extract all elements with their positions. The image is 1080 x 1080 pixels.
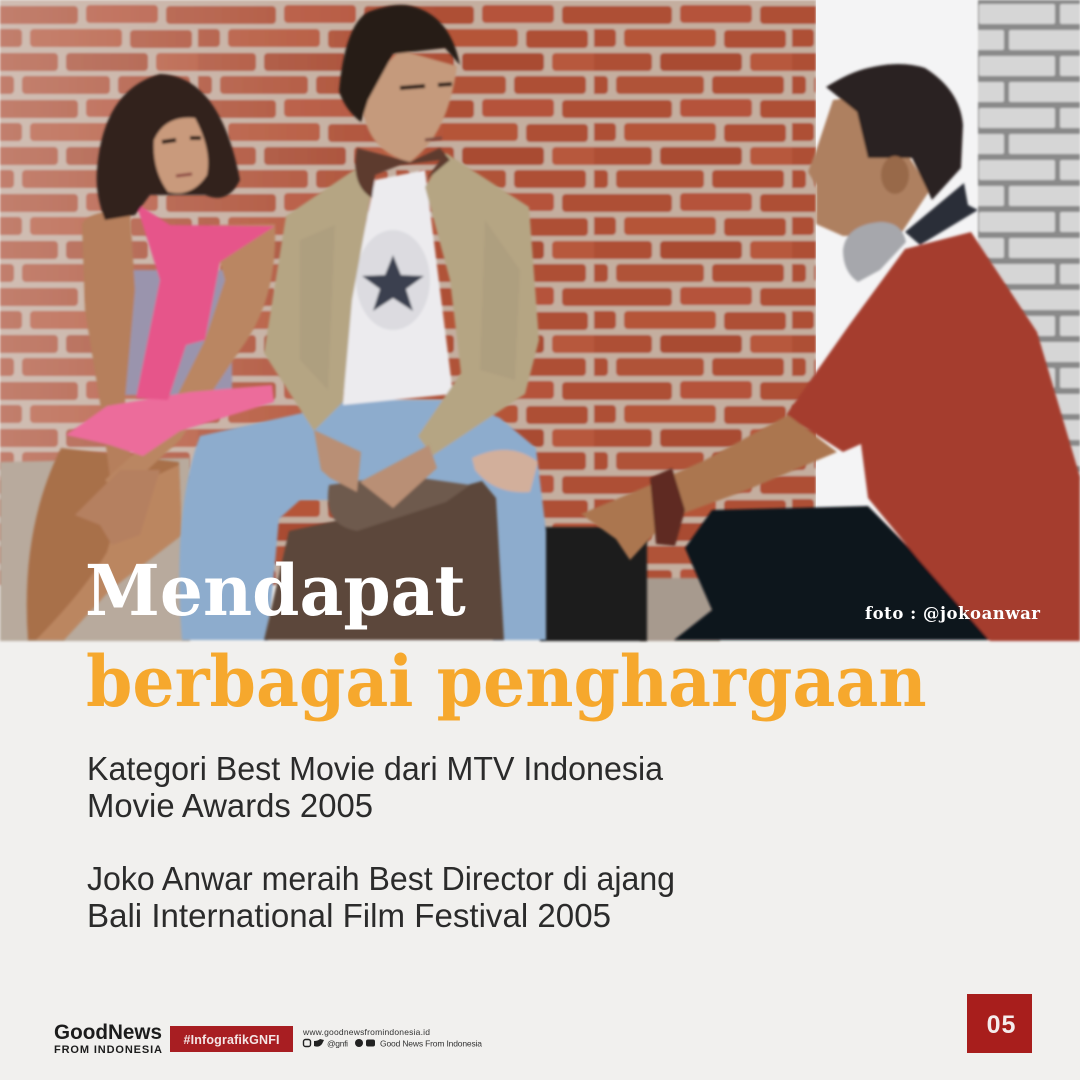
sweater xyxy=(136,203,275,400)
bag and hat xyxy=(264,430,504,640)
Converse star logo xyxy=(356,230,430,330)
shirt xyxy=(786,232,1080,641)
jeans xyxy=(179,400,546,640)
icon: youtube xyxy=(366,1040,375,1046)
award paragraph 1 xyxy=(87,750,664,824)
title line 2: berbagai penghargaan xyxy=(86,641,927,723)
body text xyxy=(87,750,675,934)
person: woman in pink xyxy=(27,74,275,640)
website and social handles xyxy=(302,1027,482,1048)
dark box xyxy=(540,527,647,641)
icon: instagram xyxy=(304,1040,310,1046)
logo: GoodNews From Indonesia xyxy=(54,1021,162,1056)
website and social handles: www.goodnewsfromindonesia.id xyxy=(302,1027,430,1037)
grey brick wall xyxy=(978,0,1080,480)
hands xyxy=(314,430,437,508)
award paragraph 2: Bali International Film Festival 2005 xyxy=(87,897,611,934)
hair and face xyxy=(97,74,240,220)
photo: film set scene with three people xyxy=(0,0,1080,641)
arms xyxy=(82,210,135,478)
white pillar xyxy=(816,0,978,510)
website and social handles: Good News From Indonesia xyxy=(380,1038,482,1048)
award paragraph 1: Kategori Best Movie dari MTV Indonesia xyxy=(87,750,664,787)
arm and hand xyxy=(581,415,837,560)
head xyxy=(808,95,930,236)
logo: GoodNews From Indonesia: GoodNews xyxy=(54,1021,162,1044)
dress xyxy=(125,270,232,395)
skirt xyxy=(66,385,274,456)
photo credit: foto : @jokoanwar xyxy=(865,604,1040,623)
footer xyxy=(54,994,1032,1056)
award paragraph 2: Joko Anwar meraih Best Director di ajang xyxy=(87,860,675,897)
person: director in red shirt with headphones xyxy=(581,64,1080,641)
knee tear xyxy=(472,450,538,492)
icon: facebook xyxy=(355,1039,363,1047)
headphones xyxy=(905,183,978,245)
legs xyxy=(27,448,182,640)
bench and floor xyxy=(0,458,720,641)
head xyxy=(362,50,457,162)
t-shirt xyxy=(343,170,453,405)
website and social handles: @gnfi xyxy=(327,1038,348,1048)
person: young man in khaki jacket xyxy=(179,5,546,640)
brick wall xyxy=(0,0,816,585)
page number: 05 xyxy=(987,1011,1016,1039)
icon: twitter xyxy=(314,1039,324,1047)
award paragraph 2 xyxy=(87,860,675,934)
page number xyxy=(967,994,1032,1053)
collar xyxy=(355,148,450,198)
award paragraph 1: Movie Awards 2005 xyxy=(87,787,373,824)
hashtag badge xyxy=(170,1026,293,1052)
logo: GoodNews From Indonesia: FROM INDONESIA xyxy=(54,1044,162,1056)
hashtag badge: #InfografikGNFI xyxy=(184,1033,280,1047)
jacket xyxy=(264,153,539,456)
title xyxy=(85,550,927,723)
trousers xyxy=(674,506,1000,640)
title line 1: Mendapat xyxy=(85,550,466,632)
hands xyxy=(75,470,160,545)
